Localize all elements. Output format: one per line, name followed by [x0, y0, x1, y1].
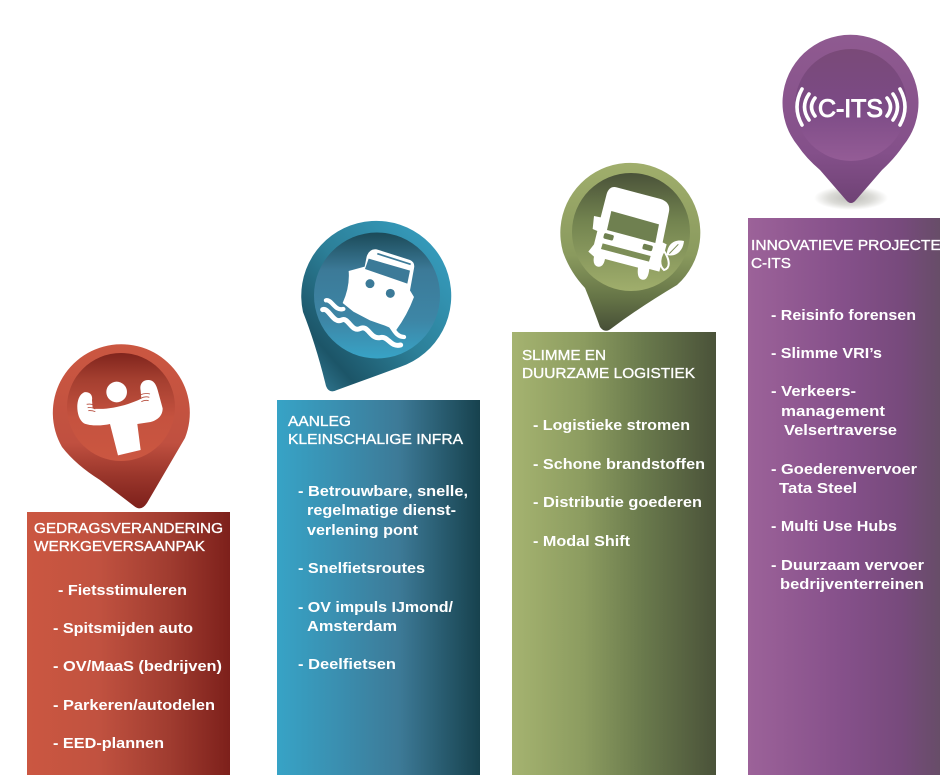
list of measures — [53, 582, 222, 752]
heading: C-ITS — [751, 255, 791, 272]
list of measures — [771, 307, 924, 593]
list of measures: - OV/MaaS (bedrijven) — [53, 658, 222, 675]
list of measures: - Verkeers- — [771, 383, 856, 400]
list of measures — [533, 417, 705, 550]
panel background — [277, 400, 480, 775]
heading: GEDRAGSVERANDERING — [34, 520, 223, 537]
pin inner circle — [572, 173, 690, 291]
pin: purple with C-ITS icon — [782, 35, 918, 210]
list of measures: bedrijventerreinen — [780, 576, 924, 593]
panel background — [512, 332, 716, 775]
icon: C-ITS signal: C-ITS — [818, 95, 883, 123]
heading — [288, 413, 463, 448]
pin inner circle — [314, 232, 440, 358]
heading: SLIMME EN — [522, 347, 606, 364]
list of measures: Velsertraverse — [784, 422, 897, 439]
panel: slimme en duurzame logistiek — [512, 332, 716, 775]
list of measures: - Goederenvervoer — [771, 461, 917, 478]
list of measures: - Multi Use Hubs — [771, 518, 897, 535]
panel: innovatieve projecten c-its — [748, 218, 940, 775]
heading — [522, 347, 695, 382]
list of measures: - Reisinfo forensen — [771, 307, 916, 324]
pin: blue with ferry icon — [301, 221, 451, 391]
icon: strong person — [77, 380, 163, 455]
pin: green with truck icon — [560, 163, 700, 331]
list of measures — [298, 483, 468, 673]
list of measures: Tata Steel — [779, 480, 857, 497]
list of measures: - Spitsmijden auto — [53, 620, 193, 637]
icon: ferry on waves — [323, 249, 414, 345]
icon: C-ITS signal — [797, 89, 905, 125]
list of measures: - Betrouwbare, snelle, — [298, 483, 468, 500]
list of measures: Amsterdam — [307, 618, 397, 635]
panel background — [748, 218, 940, 775]
list of measures: - EED-plannen — [53, 735, 164, 752]
heading — [34, 520, 223, 555]
list of measures: verlening pont — [307, 522, 418, 539]
heading: KLEINSCHALIGE INFRA — [288, 431, 463, 448]
heading: WERKGEVERSAANPAK — [34, 538, 205, 555]
pin shadow — [814, 186, 888, 210]
pin body — [53, 344, 190, 508]
heading: AANLEG — [288, 413, 351, 430]
pin body — [560, 163, 700, 331]
pin body — [301, 221, 451, 391]
heading: INNOVATIEVE PROJECTEN — [751, 237, 940, 254]
pin body — [782, 35, 918, 203]
list of measures: - Duurzaam vervoer — [771, 557, 924, 574]
list of measures: - Snelfietsroutes — [298, 560, 425, 577]
panel background — [27, 512, 230, 775]
list of measures: - Schone brandstoffen — [533, 456, 705, 473]
list of measures: - Deelfietsen — [298, 656, 396, 673]
heading — [751, 237, 940, 272]
list of measures: - OV impuls IJmond/ — [298, 599, 454, 616]
icon: truck with leaf — [588, 187, 684, 280]
list of measures: regelmatige dienst- — [307, 502, 456, 519]
heading: DUURZAME LOGISTIEK — [522, 365, 695, 382]
pin inner circle — [67, 353, 175, 461]
list of measures: - Parkeren/autodelen — [53, 697, 215, 714]
panel: aanleg kleinschalige infra — [277, 400, 480, 775]
panel: gedragsverandering — [27, 512, 230, 775]
list of measures: - Fietsstimuleren — [58, 582, 187, 599]
pin: red with strong person icon — [53, 344, 190, 508]
list of measures: - Distributie goederen — [533, 494, 702, 511]
list of measures: - Modal Shift — [533, 533, 630, 550]
list of measures: - Slimme VRI’s — [771, 345, 882, 362]
list of measures: - Logistieke stromen — [533, 417, 690, 434]
list of measures: management — [781, 403, 885, 420]
pin inner circle — [795, 49, 907, 161]
